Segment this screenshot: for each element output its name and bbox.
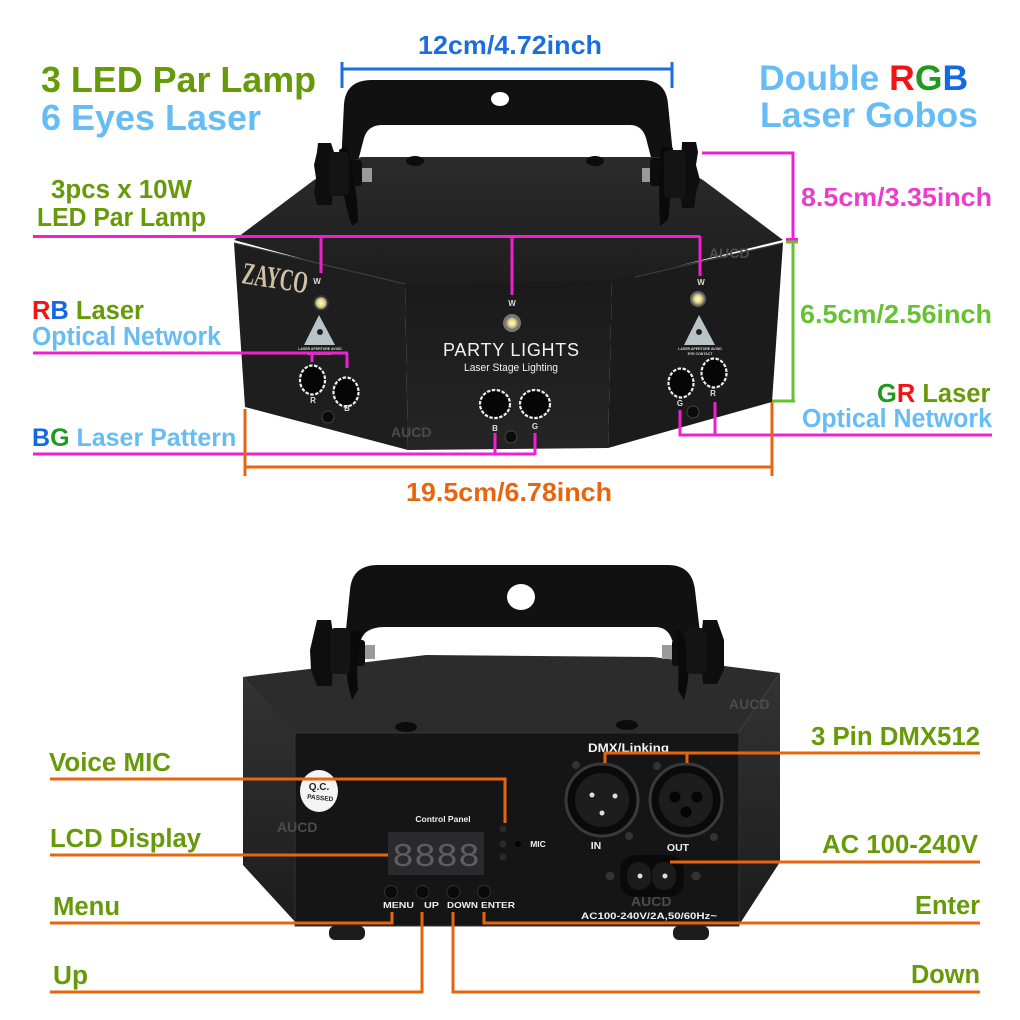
dimension: width 19.5cm: 19.5cm/6.78inch: [406, 477, 612, 507]
button labels: ENTER: [481, 900, 515, 910]
laser warning triangles: [298, 315, 722, 356]
edge highlights: [234, 243, 783, 284]
W labels: W: [313, 277, 321, 286]
callout: RB Laser Optical Network: RB Laser: [32, 297, 144, 325]
aperture letters: [310, 389, 716, 433]
callout: RB Laser Optical Network: [32, 297, 348, 368]
rear handle bracket: [344, 565, 702, 650]
callout: Down: Down: [911, 961, 980, 989]
callout: BG Laser Pattern: [32, 424, 535, 455]
heading: Double RGB Laser Gobos: Laser Gobos: [760, 95, 978, 135]
callout: Menu: Menu: [53, 893, 120, 921]
aperture letters: B: [492, 424, 498, 433]
logo: ZAYCO: [240, 255, 311, 300]
W labels: [313, 277, 705, 308]
brand text: PARTY LIGHTS: [443, 340, 579, 374]
heading: 3 LED Par Lamp 6 Eyes Laser: 3 LED Par Lamp: [41, 59, 316, 100]
watermark AUCD rear: AUCD: [729, 696, 769, 712]
callout: Up: Up: [53, 962, 88, 990]
MIC indicators: [500, 826, 546, 860]
top plate: [234, 157, 783, 287]
aperture letters: G: [532, 422, 538, 431]
heading: 3 LED Par Lamp 6 Eyes Laser: 6 Eyes Laser: [41, 97, 261, 138]
callout: Up: [50, 912, 422, 992]
dimension: height 6.5cm: 6.5cm/2.56inch: [800, 299, 992, 329]
rear panel: [295, 733, 739, 926]
dimension: handle width 12cm: 12cm/4.72inch: [418, 30, 602, 60]
front centre facet: [405, 280, 612, 450]
rear plate screws: [395, 720, 638, 732]
callout: Enter: Enter: [915, 892, 980, 920]
aperture letters: R: [710, 389, 716, 398]
callout: Voice MIC: [49, 749, 505, 823]
watermark AUCD rear: AUCD: [277, 819, 317, 835]
brand text: PARTY LIGHTS: Laser Stage Lighting: [464, 362, 558, 374]
rear knobs and bolts: [310, 620, 724, 700]
callout: GR Laser Optical Network: [680, 380, 993, 435]
callout: 3 Pin DMX512: 3 Pin DMX512: [811, 723, 980, 751]
heading: Double RGB Laser Gobos: Double RGB: [759, 58, 968, 98]
watermark AUCD: [391, 245, 749, 440]
laser warning triangles: LASER APERTURE AVOID: [298, 347, 342, 351]
dimension: handle width 12cm: [342, 30, 672, 88]
Control Panel label: Control Panel: [415, 814, 471, 824]
watermark AUCD rear: AUCD: [631, 893, 671, 909]
aperture letters: G: [677, 399, 683, 408]
callout: AC 100-240V: AC 100-240V: [822, 831, 978, 859]
control buttons: [384, 886, 490, 898]
callout: Enter: [484, 892, 980, 923]
laser warning triangles: EYE CONTACT: [688, 352, 713, 356]
power socket: [606, 855, 700, 897]
QC sticker: PASSED: [307, 794, 334, 803]
button labels: MENU: [383, 900, 414, 910]
product photo: front of unit: [234, 80, 783, 450]
brand text: PARTY LIGHTS: PARTY LIGHTS: [443, 340, 579, 360]
callout: 3pcs x 10W LED Par Lamp: LED Par Lamp: [37, 204, 206, 232]
front left facet: [234, 243, 408, 450]
LCD display: [388, 832, 484, 876]
LED lamps: [313, 291, 706, 332]
callout: GR Laser Optical Network: GR Laser: [877, 380, 990, 408]
aperture letters: R: [310, 396, 316, 405]
callout: Down: [453, 912, 980, 992]
heading: 3 LED Par Lamp 6 Eyes Laser: [41, 59, 316, 138]
top screws: [406, 156, 604, 166]
laser warning triangles: EYE CONTACT: [308, 352, 333, 356]
callout: 3 Pin DMX512: [605, 723, 980, 763]
MIC indicators: MIC: [530, 839, 546, 849]
callout: Voice MIC: Voice MIC: [49, 749, 171, 777]
rear left side: [243, 677, 298, 925]
XLR IN connector: [566, 761, 638, 852]
callout: LCD Display: LCD Display: [50, 825, 202, 853]
left knob and bolt: [314, 143, 372, 226]
feet: [329, 926, 709, 940]
button labels: UP: [424, 900, 439, 910]
callout: RB Laser Optical Network: Optical Network: [32, 323, 222, 351]
heading: Double RGB Laser Gobos: [759, 58, 978, 135]
watermark AUCD: AUCD: [709, 245, 749, 261]
QC sticker: [300, 770, 338, 812]
laser apertures: [300, 358, 726, 418]
XLR IN connector: IN: [591, 840, 601, 852]
callout: 3pcs x 10W LED Par Lamp: [33, 176, 700, 295]
rear right side: [738, 673, 780, 925]
W labels: W: [697, 278, 705, 287]
LCD display: 8888: [392, 839, 480, 876]
button labels: DOWN: [447, 900, 478, 910]
watermark AUCD rear: [277, 696, 769, 909]
right knob and bolt: [642, 142, 700, 226]
aperture letters: B: [344, 404, 350, 413]
watermark AUCD: AUCD: [391, 424, 431, 440]
power rating text: AC100-240V/2A,50/60Hz~: [581, 911, 717, 921]
dimension: height 6.5cm: [772, 242, 992, 401]
callout: GR Laser Optical Network: Optical Network: [802, 405, 993, 433]
rear top plate: [243, 655, 780, 733]
XLR OUT connector: OUT: [667, 842, 690, 854]
callout: BG Laser Pattern: BG Laser Pattern: [32, 424, 236, 452]
callout: Menu: [50, 893, 392, 923]
button labels: [383, 900, 515, 910]
W labels: W: [508, 299, 516, 308]
handle bracket: [341, 80, 674, 165]
front screws: [322, 406, 699, 443]
QC sticker: Q.C.: [309, 782, 329, 793]
front right facet: [608, 243, 783, 448]
dimension: height 8.5cm: [702, 153, 992, 240]
XLR OUT connector: [650, 762, 722, 854]
dimension: height 8.5cm: 8.5cm/3.35inch: [801, 182, 992, 212]
DMX/Linking label: DMX/Linking: [588, 743, 669, 755]
callout: 3pcs x 10W LED Par Lamp: 3pcs x 10W: [51, 176, 193, 204]
dimension: width 19.5cm: [245, 402, 772, 507]
laser warning triangles: LASER APERTURE AVOID: [678, 347, 722, 351]
product photo: rear of unit: [243, 565, 780, 940]
